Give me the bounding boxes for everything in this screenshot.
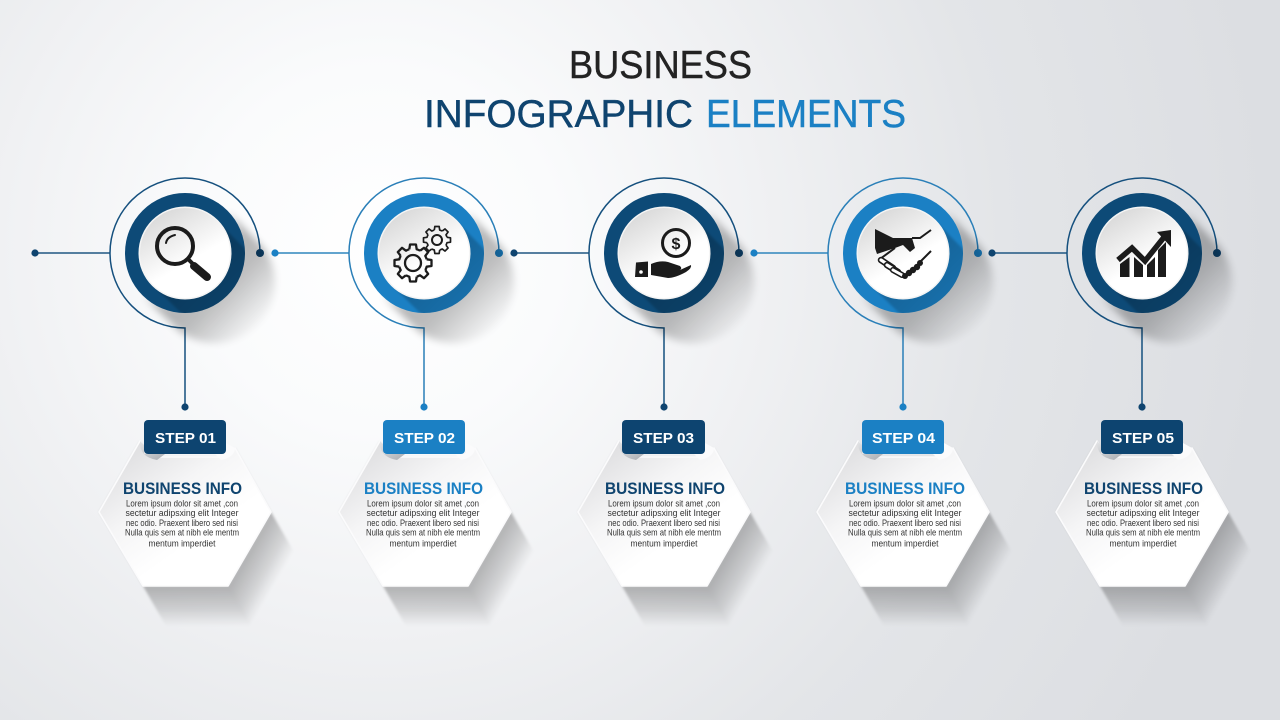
step 4: text block xyxy=(845,479,965,548)
step 3: text block: nec odio. Praexent libero sed nisi xyxy=(608,518,720,528)
step 3: hexagon card xyxy=(578,441,773,626)
step 4: text block: BUSINESS INFO xyxy=(845,479,965,498)
step 1: text block: Nulla quis sem at nibh ele mentm xyxy=(125,528,239,538)
step 1: text block: BUSINESS INFO xyxy=(123,479,242,498)
step 4: text block: mentum imperdiet xyxy=(872,538,939,548)
step 5: label tab: STEP 05 xyxy=(1112,430,1174,447)
step 3: text block: mentum imperdiet xyxy=(630,538,698,548)
step 3: text block: Nulla quis sem at nibh ele mentm xyxy=(607,528,721,538)
title: INFOGRAPHIC xyxy=(424,93,693,136)
step 2: label tab: STEP 02 xyxy=(394,430,455,447)
step 5: label tab xyxy=(1101,420,1183,454)
icon: magnifying glass xyxy=(157,228,207,277)
step 3: circle node xyxy=(510,178,754,411)
step 5: text block: sectetur adipsxing elit Integer xyxy=(1086,508,1200,518)
step 4: circle node xyxy=(750,178,993,411)
step 1: circle node xyxy=(31,178,275,411)
step 2: label tab xyxy=(383,420,465,454)
step 2: text block xyxy=(364,479,483,548)
step 5: circle node xyxy=(988,178,1232,411)
step 1: hexagon card xyxy=(99,441,294,626)
step 3: text block: BUSINESS INFO xyxy=(605,479,725,498)
step 4: text block: nec odio. Praexent libero sed nisi xyxy=(849,518,961,528)
step 4: hexagon card xyxy=(817,441,1012,626)
step 2: hexagon card xyxy=(339,441,534,626)
step 2: text block: sectetur adipsxing elit Integer xyxy=(366,508,480,518)
step 1: text block xyxy=(123,479,242,548)
step 3: label tab: STEP 03 xyxy=(633,430,694,447)
step 4: text block: Nulla quis sem at nibh ele mentm xyxy=(848,528,962,538)
step 5: hexagon card xyxy=(1056,441,1251,626)
step 1: label tab: STEP 01 xyxy=(155,430,216,447)
step 3: text block: sectetur adipsxing elit Integer xyxy=(608,508,721,518)
step 2: text block: mentum imperdiet xyxy=(390,538,457,548)
step 2: text block: Nulla quis sem at nibh ele mentm xyxy=(366,528,480,538)
step 5: text block xyxy=(1084,479,1203,548)
title: ELEMENTS xyxy=(706,93,906,136)
step 5: text block: Lorem ipsum dolor sit amet ,con xyxy=(1087,498,1199,508)
step 2: circle node xyxy=(271,178,514,411)
step 2: text block: BUSINESS INFO xyxy=(364,479,483,498)
icon: growth chart xyxy=(1118,230,1171,277)
step 2: text block: Lorem ipsum dolor sit amet ,con xyxy=(367,498,479,508)
icon: hand holding dollar: $ xyxy=(672,236,681,253)
step 5: text block: Nulla quis sem at nibh ele mentm xyxy=(1086,528,1200,538)
step 3: label tab xyxy=(622,420,705,454)
step 1: label tab xyxy=(144,420,226,454)
step 5: text block: nec odio. Praexent libero sed nisi xyxy=(1087,518,1199,528)
step 1: text block: mentum imperdiet xyxy=(148,538,216,548)
step 4: text block: sectetur adipsxing elit Integer xyxy=(848,508,962,518)
step 2: text block: nec odio. Praexent libero sed nisi xyxy=(367,518,479,528)
icon: hand holding dollar xyxy=(635,230,691,278)
step 4: label tab: STEP 04 xyxy=(872,430,936,447)
step 1: text block: Lorem ipsum dolor sit amet ,con xyxy=(126,498,238,508)
step 3: text block: Lorem ipsum dolor sit amet ,con xyxy=(608,498,720,508)
step 4: label tab xyxy=(862,420,944,454)
icon: gears xyxy=(394,226,450,282)
step 1: text block: nec odio. Praexent libero sed nisi xyxy=(126,518,238,528)
title: BUSINESS xyxy=(569,44,752,87)
step 4: text block: Lorem ipsum dolor sit amet ,con xyxy=(849,498,961,508)
step 1: text block: sectetur adipsxing elit Integer xyxy=(126,508,239,518)
step 3: text block xyxy=(605,479,725,548)
step 5: text block: mentum imperdiet xyxy=(1110,538,1177,548)
title xyxy=(424,44,906,136)
icon: handshake xyxy=(875,229,931,279)
step 5: text block: BUSINESS INFO xyxy=(1084,479,1203,498)
